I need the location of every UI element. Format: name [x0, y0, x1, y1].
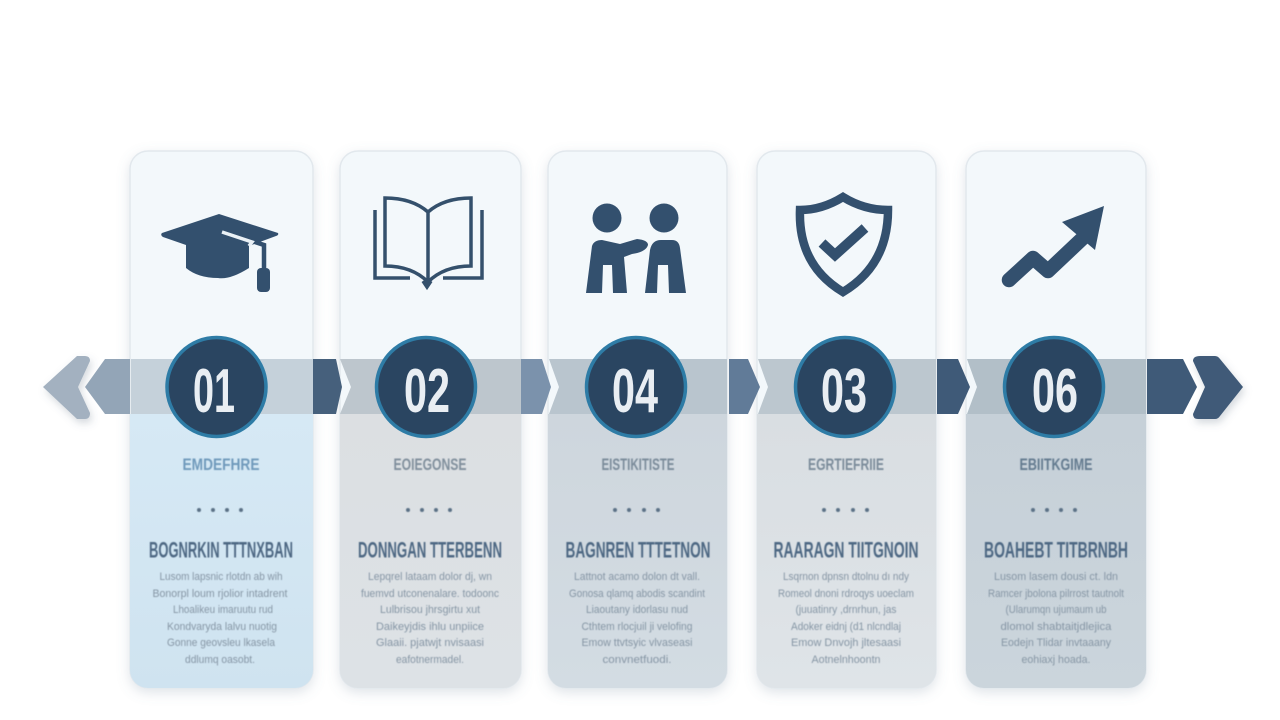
text block: card 4: RAARAGN TIITGNOIN: [774, 538, 918, 562]
number badge 03: [796, 338, 894, 436]
text block: card 3: Lattnot acamo dolon dt vall.: [574, 571, 700, 583]
text block: card 3: Gonosa qlamq abodis scandint: [569, 588, 705, 600]
arrow: connector 2 to 3: [521, 359, 551, 414]
panel: card 4 background: [757, 151, 936, 688]
arrow: far left chevron: [43, 356, 90, 419]
arrow: far right chevron: [1193, 356, 1243, 419]
text block: card 2: Lepqrel lataam dolor dj, wn: [368, 571, 492, 583]
text block: card 3: convnetfuodi.: [602, 654, 672, 666]
number badge 05: [1004, 338, 1104, 436]
arrow: right segment: [1147, 359, 1197, 414]
text block: card 5: Ramcer jbolona pilrrost tautnolt: [988, 588, 1124, 600]
number badge 04: [586, 338, 686, 436]
arrow: inner left segment: [85, 359, 130, 414]
arrow: connector 4 to 5: [937, 359, 970, 414]
text block: card 4: Lsqrnon dpnsn dtolnu dı ndy: [783, 571, 909, 583]
text block: card 4: Romeol dnoni rdroqys uoeclam: [778, 588, 914, 600]
timeline band with arrow segments: [43, 356, 1243, 419]
text block: card 1: Lhoalikeu imaruutu rud: [173, 604, 273, 616]
number badge 01: [167, 338, 266, 436]
number badge 02: 02: [404, 357, 450, 426]
text block: card 1: BOGNRKIN TTTNXBAN: [149, 538, 293, 562]
text block: card 1: Gonne geovsleu lkasela: [167, 637, 276, 649]
band tile: card 4: [758, 359, 936, 414]
text block: card 5: eohiaxj hoada.: [1022, 654, 1090, 666]
text block: card 2: fuemvd utconenalare. todoonc: [361, 588, 499, 600]
text block: card 2: Lulbrisou jhrsgirtu xut: [380, 604, 480, 616]
arrow: connector 3 to 4: [729, 359, 760, 414]
text block: card 1: EMDEFHRE: [182, 455, 260, 474]
text block: card 2: DONNGAN TTERBENN: [358, 538, 502, 562]
icon: rising arrow: [1009, 206, 1104, 280]
number badge 02: [376, 338, 476, 436]
band tile: card 3: [549, 359, 727, 414]
text block: card 4: Aotnelnhoontn: [812, 654, 880, 666]
number badge 05: 06: [1032, 357, 1078, 426]
text block: card 3: [566, 455, 710, 666]
icon: shield with check: [800, 197, 888, 292]
text block: card 5: EBIITKGIME: [1020, 455, 1092, 474]
icon: two people: [586, 204, 686, 293]
text block: card 4: [774, 455, 918, 666]
number badge 03: 03: [821, 357, 867, 426]
icon: graduation cap: [161, 214, 278, 292]
text block: card 2: eafotnermadel.: [396, 654, 464, 666]
panel: card 2 background: [340, 151, 521, 688]
text block: card 1: Kondvaryda lalvu nuotig: [167, 621, 277, 633]
panel: card 5 background: [966, 151, 1146, 688]
band tile: card 5: [967, 359, 1146, 414]
text block: card 3: BAGNREN TTTETNON: [566, 538, 710, 562]
text block: card 1: Bonorpl loum rjolior intadrent: [152, 588, 288, 600]
text block: card 5: Eodejn Tlidar invtaaany: [1001, 637, 1111, 649]
text block: card 2: [358, 455, 502, 666]
text block: card 1: ddlumq oasobt.: [185, 654, 255, 666]
band tile: card 1: [131, 359, 313, 414]
text block: card 5: Lusom lasem dousi ct. ldn: [994, 571, 1118, 583]
text block: card 5: dlomol shabtaitjdlejica: [1000, 621, 1112, 633]
text block: card 3: Cthtem rlocjuil ji velofing: [582, 621, 692, 633]
text block: card 2: Glaaii. pjatwjt nvisaasi: [376, 637, 484, 649]
text block: card 3: EISTIKITISTE: [602, 455, 674, 474]
text block: card 3: Liaoutany idorlasu nud: [586, 604, 688, 616]
text block: card 2: Daikeyjdis ihlu unpiice: [376, 621, 484, 633]
text block: card 4: (juuatinry ,drnrhun, jas: [796, 604, 897, 616]
number badge 01: 01: [193, 357, 235, 426]
panel: card 1 background: [130, 151, 313, 688]
arrow: connector 1 to 2: [313, 359, 342, 414]
text block: card 5: [984, 455, 1128, 666]
text block: card 5: BOAHEBT TITBRNBH: [984, 538, 1128, 562]
text block: card 4: Emow Dnvojh jltesaasi: [791, 637, 901, 649]
text block: card 4: EGRTIEFRIIE: [808, 455, 884, 474]
number badge 04: 04: [612, 357, 658, 426]
text block: card 2: EOIEGONSE: [394, 455, 466, 474]
text block: card 1: Lusom lapsnic rlotdn ab wih: [160, 571, 282, 583]
panel: card 3 background: [548, 151, 727, 688]
text block: card 3: Emow ttvtsyic vlvaseasi: [582, 637, 692, 649]
icon: open book: [375, 198, 482, 287]
text block: card 1: [149, 455, 293, 666]
text block: card 5: (Ularumqn ujumaum ub: [1006, 604, 1106, 616]
text block: card 4: Adoker eidnj (d1 nlcndlaj: [791, 621, 901, 633]
band tile: card 2: [340, 359, 521, 414]
